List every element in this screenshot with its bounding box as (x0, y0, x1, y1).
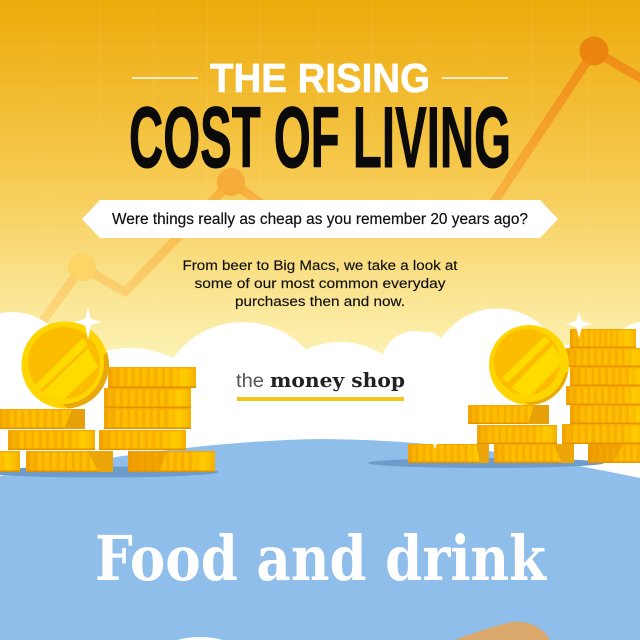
plate top (162, 637, 238, 640)
section heading: food and drink: Food and drink (95, 522, 548, 595)
right big coin (489, 325, 569, 405)
blue ground (0, 439, 640, 640)
logo: the money shop (236, 368, 405, 401)
intro text: some of our most common everyday (194, 276, 446, 291)
sparkle left (74, 308, 102, 340)
sparkles right (430, 312, 592, 449)
rising line chart (35, 36, 640, 332)
intro text: purchases then and now. (235, 294, 405, 309)
logo: the money shop: the (236, 371, 264, 392)
subtitle banner (82, 200, 558, 238)
background sky (0, 0, 640, 380)
intro text: From beer to Big Macs, we take a look at (182, 258, 458, 273)
left coin stacks (0, 367, 215, 472)
right coin stacks (408, 329, 640, 463)
title: the rising: THE RISING (210, 55, 430, 101)
intro text (182, 258, 458, 309)
logo: the money shop: money shop (270, 368, 405, 392)
left big coin (22, 322, 109, 408)
ground shadows (0, 458, 604, 478)
subtitle banner: Were things really as cheap as you remember 20 years ago? (112, 211, 528, 228)
clouds (0, 308, 640, 542)
food item top (455, 622, 550, 640)
